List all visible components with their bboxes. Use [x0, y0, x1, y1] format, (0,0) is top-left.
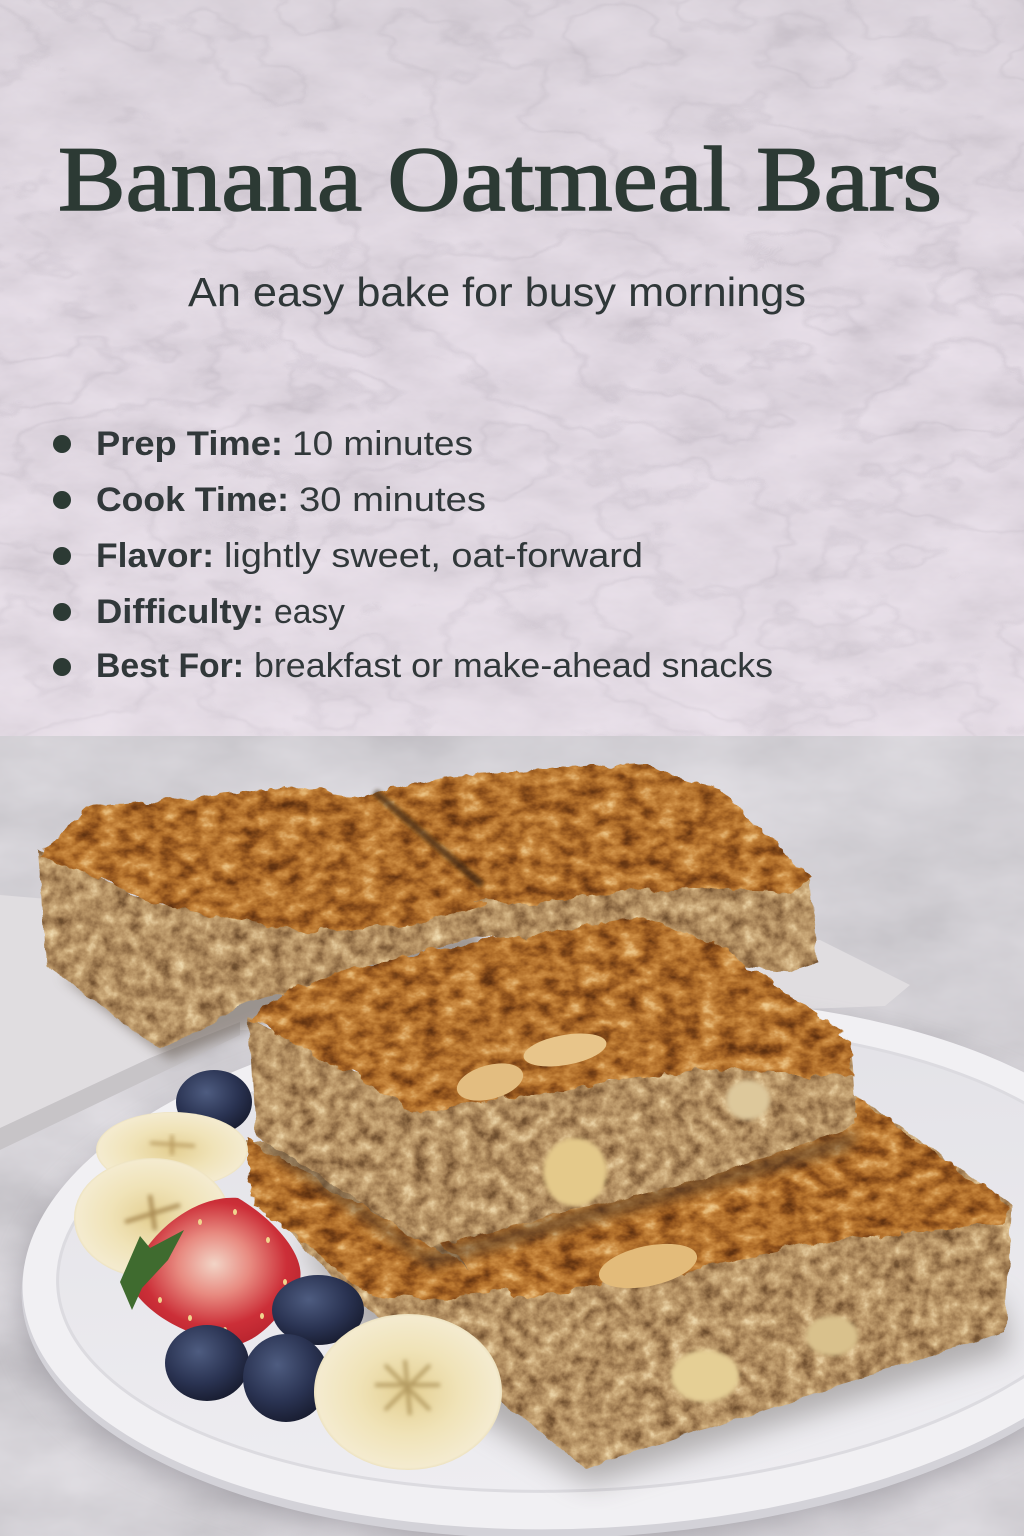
fact: difficulty — [53, 593, 345, 631]
fact: cook time: 30 minutes — [299, 481, 486, 519]
marble background: header — [0, 0, 1024, 736]
top bar — [248, 918, 860, 1268]
blueberry — [272, 1275, 364, 1345]
facts list — [53, 425, 773, 685]
fruit garnish — [74, 1070, 502, 1470]
fact: cook time — [53, 481, 486, 519]
strawberry — [120, 1198, 301, 1345]
oat flakes — [521, 1028, 609, 1072]
fact: flavor: Flavor: — [96, 537, 214, 575]
cutting board — [0, 895, 910, 1150]
banana slice — [74, 1158, 230, 1278]
subtitle: An easy bake for busy mornings — [188, 269, 806, 315]
fact: prep time — [53, 425, 473, 463]
oat flake — [595, 1236, 701, 1296]
title: Banana Oatmeal Bars — [58, 128, 942, 230]
fact: prep time: Prep Time: — [96, 425, 283, 463]
fact: best for — [53, 647, 773, 685]
banana slice — [314, 1314, 502, 1470]
back bar: left — [38, 786, 485, 1060]
fact: flavor: lightly sweet, oat-forward — [224, 537, 643, 575]
fact: prep time: 10 minutes — [292, 425, 473, 463]
back bar: right — [350, 763, 818, 972]
plate — [5, 969, 1024, 1536]
banana chunk — [806, 1316, 858, 1356]
fact: flavor — [53, 537, 643, 575]
fact: difficulty: Difficulty: — [96, 593, 264, 631]
banana chunks — [543, 1138, 607, 1206]
fact: best for: breakfast or make-ahead snacks — [254, 647, 773, 685]
fact: best for: Best For: — [96, 647, 244, 685]
blueberry — [165, 1325, 249, 1401]
fact: cook time: Cook Time: — [96, 481, 289, 519]
banana slice — [96, 1112, 248, 1188]
marble tabletop — [0, 736, 1024, 1536]
bottom bar — [245, 1095, 1012, 1485]
banana chunk — [671, 1350, 739, 1402]
blueberry — [243, 1334, 329, 1422]
blueberry — [176, 1070, 252, 1134]
fact: difficulty: easy — [274, 593, 345, 631]
photo: banana oatmeal bars on a plate — [0, 736, 1024, 1536]
